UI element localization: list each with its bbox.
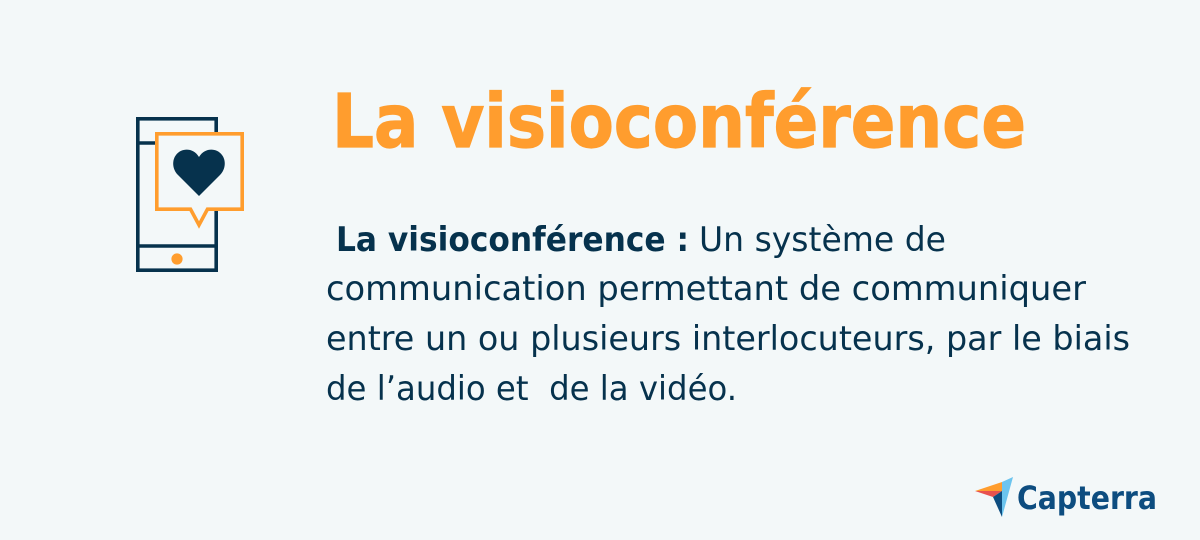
definition line 3: entre un ou plusieurs interlocuteurs, par le biais <box>326 319 1130 358</box>
definition line 4: de l’audio et de la vidéo. <box>326 369 737 408</box>
Capterra logo <box>975 477 1157 517</box>
icon: heart <box>173 150 225 196</box>
logo mark <box>975 477 1013 517</box>
icon: phone body <box>137 119 217 270</box>
icon: phone button <box>171 253 183 265</box>
definition text block <box>326 220 1130 408</box>
icon: speech bubble <box>157 134 242 225</box>
title: La visioconférence <box>332 79 1026 165</box>
definition line 2: communication permettant de communiquer <box>326 269 1086 308</box>
logo wordmark: Capterra <box>1017 479 1157 517</box>
definition line 1: Un système de <box>699 220 946 259</box>
icon: phone with heart message bubble <box>137 119 242 270</box>
definition term: La visioconférence : <box>336 220 689 259</box>
